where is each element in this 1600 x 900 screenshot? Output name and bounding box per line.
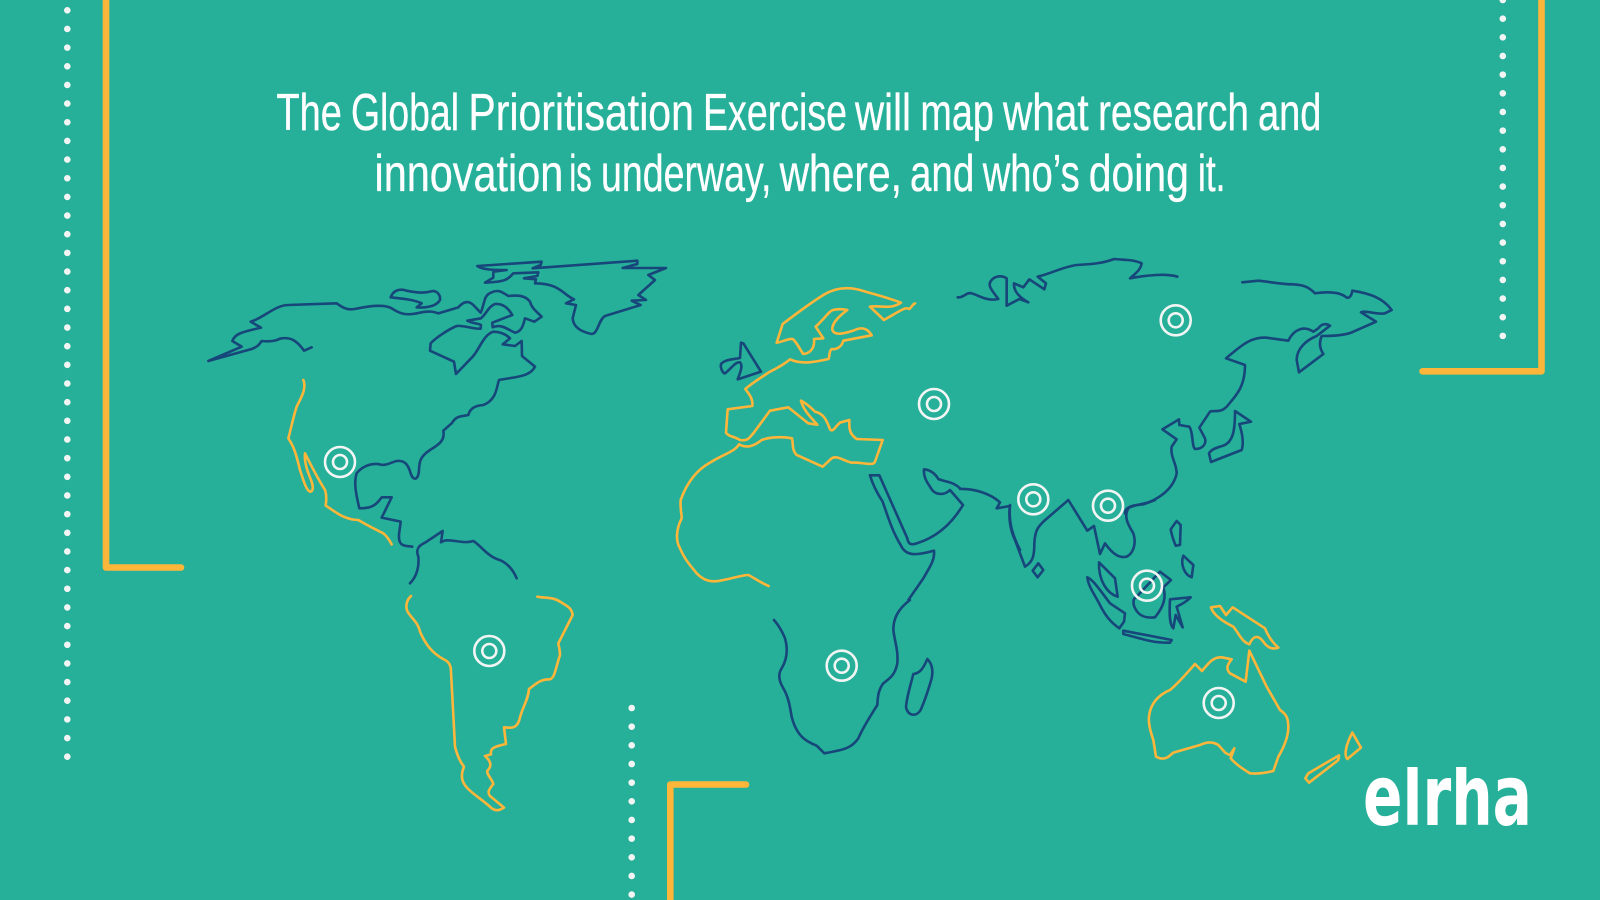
map: South and South-East Asia with Oceania (1009, 500, 1361, 783)
marker: India (1018, 484, 1048, 514)
decoration: top-right dotted line (1500, 0, 1506, 337)
marker: Borneo (1132, 571, 1162, 601)
title: doing (1089, 145, 1189, 203)
title: is (569, 145, 592, 203)
title: it. (1198, 145, 1226, 203)
marker: Siberia (1161, 305, 1191, 335)
decoration: bottom dotted line (628, 708, 635, 900)
title: The (276, 84, 342, 142)
decoration: left dotted line (64, 10, 71, 757)
decoration: bottom orange bracket (670, 784, 746, 900)
title: Prioritisation (468, 84, 694, 142)
title: map (920, 84, 994, 142)
map: Asia (958, 259, 1392, 550)
world map (208, 259, 1392, 810)
title: research (1098, 84, 1249, 142)
marker: southern Africa (827, 651, 857, 681)
map: North America (208, 261, 666, 547)
marker: South America (474, 636, 504, 666)
title: will (854, 84, 911, 142)
logo: elrha: elrha (1363, 747, 1532, 845)
map: South America (406, 531, 573, 810)
title: innovation (374, 145, 563, 203)
marker: North America (325, 447, 355, 477)
title: where, (779, 145, 902, 203)
marker: South-East Asia (1093, 491, 1123, 521)
marker: Central Asia (919, 389, 949, 419)
map: Europe and North Africa (677, 288, 963, 600)
title: Exercise (703, 84, 847, 142)
decoration: left orange bracket (106, 0, 181, 568)
title: and (1258, 84, 1321, 142)
marker: Australia (1204, 688, 1234, 718)
title: Global (351, 84, 459, 142)
title: what (1002, 84, 1089, 142)
title: underway, (601, 145, 771, 203)
location markers (325, 305, 1234, 718)
title: who’s (982, 145, 1080, 203)
title (276, 84, 1321, 203)
map: southern Africa and Madagascar (774, 600, 932, 753)
decoration: top-right orange bracket (1422, 0, 1542, 371)
title: and (910, 145, 974, 203)
